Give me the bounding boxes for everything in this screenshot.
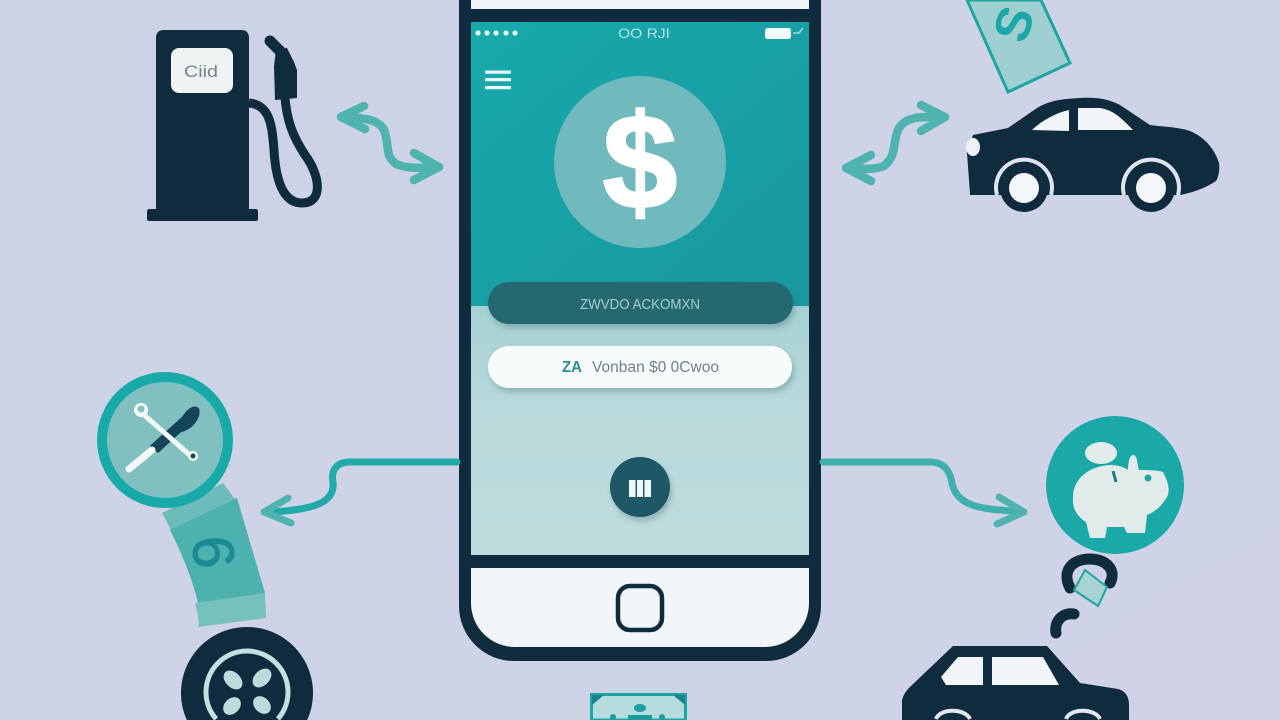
fuel pump xyxy=(147,30,317,221)
pump display xyxy=(171,48,233,93)
dark button label: ZWVDO ACKOMXN xyxy=(580,296,700,313)
tire outer xyxy=(181,627,313,720)
pig slot xyxy=(1113,471,1116,482)
front wheel arch xyxy=(936,711,970,719)
arrow: car to phone xyxy=(846,105,945,181)
headlight xyxy=(966,138,980,156)
strip number: 6 xyxy=(179,533,247,571)
pause button xyxy=(610,457,670,517)
strip top xyxy=(162,483,237,532)
car body xyxy=(902,646,1129,720)
home button xyxy=(618,586,662,630)
pump hose xyxy=(249,98,317,203)
note symbol: S xyxy=(982,0,1046,49)
bottom bezel xyxy=(471,568,809,647)
arrow: phone to repairs xyxy=(264,462,457,523)
screwdriver tip xyxy=(129,450,152,469)
small banknote xyxy=(1074,570,1107,606)
note corners xyxy=(592,695,685,705)
phone body xyxy=(459,0,821,661)
strip end xyxy=(195,593,266,627)
dollar circle xyxy=(554,76,726,248)
note emblem xyxy=(610,704,665,720)
banknote: bottom center xyxy=(592,694,686,720)
dollar sign: $ xyxy=(603,88,677,237)
pump nozzle xyxy=(270,41,297,100)
white button icon: ZA xyxy=(562,359,582,376)
car: bottom right xyxy=(902,646,1129,720)
car body xyxy=(967,98,1219,195)
coin xyxy=(1085,442,1117,464)
pump body xyxy=(147,30,258,221)
strip body xyxy=(170,498,265,623)
pause bars xyxy=(629,480,651,497)
white button label: Vonban $0 0Cwoo xyxy=(592,359,719,376)
icon: tire xyxy=(181,627,313,720)
banknote: top right xyxy=(967,0,1070,92)
status dots xyxy=(475,30,518,36)
note shape xyxy=(967,0,1070,92)
white button xyxy=(488,346,792,388)
battery xyxy=(765,28,803,39)
dark button xyxy=(488,282,793,324)
car: top right xyxy=(966,98,1219,212)
smartphone xyxy=(459,0,821,661)
repair banknote strip xyxy=(162,483,266,627)
pump label: Ciid xyxy=(184,62,218,81)
screen lower xyxy=(471,306,809,555)
tire rim xyxy=(206,651,288,719)
screwdriver handle xyxy=(152,408,198,451)
wrench xyxy=(134,403,198,461)
front window xyxy=(941,657,983,685)
rear wheel xyxy=(1123,160,1179,212)
piggy circle xyxy=(1046,416,1184,554)
pig body xyxy=(1073,455,1169,538)
icon: piggy bank xyxy=(1046,416,1184,554)
rear wheel arch xyxy=(1066,711,1100,719)
front wheel xyxy=(996,160,1052,212)
icon: wrench and screwdriver xyxy=(102,377,228,503)
upper arc xyxy=(1067,559,1112,588)
arrow: fuel to phone xyxy=(341,106,439,180)
top bezel xyxy=(471,0,809,9)
note outline xyxy=(592,694,686,720)
rear window xyxy=(1078,108,1133,130)
status title: OO RJI xyxy=(618,25,670,41)
screen upper xyxy=(471,22,809,306)
rear window xyxy=(992,657,1059,685)
pig eye xyxy=(1144,474,1152,482)
tool circle xyxy=(102,377,228,503)
lower arc xyxy=(1056,614,1074,633)
front window xyxy=(1032,110,1069,131)
arrow: phone to savings xyxy=(823,462,1024,524)
tire spokes xyxy=(220,665,275,718)
menu icon xyxy=(485,70,511,89)
falling coin arcs xyxy=(1056,559,1112,633)
